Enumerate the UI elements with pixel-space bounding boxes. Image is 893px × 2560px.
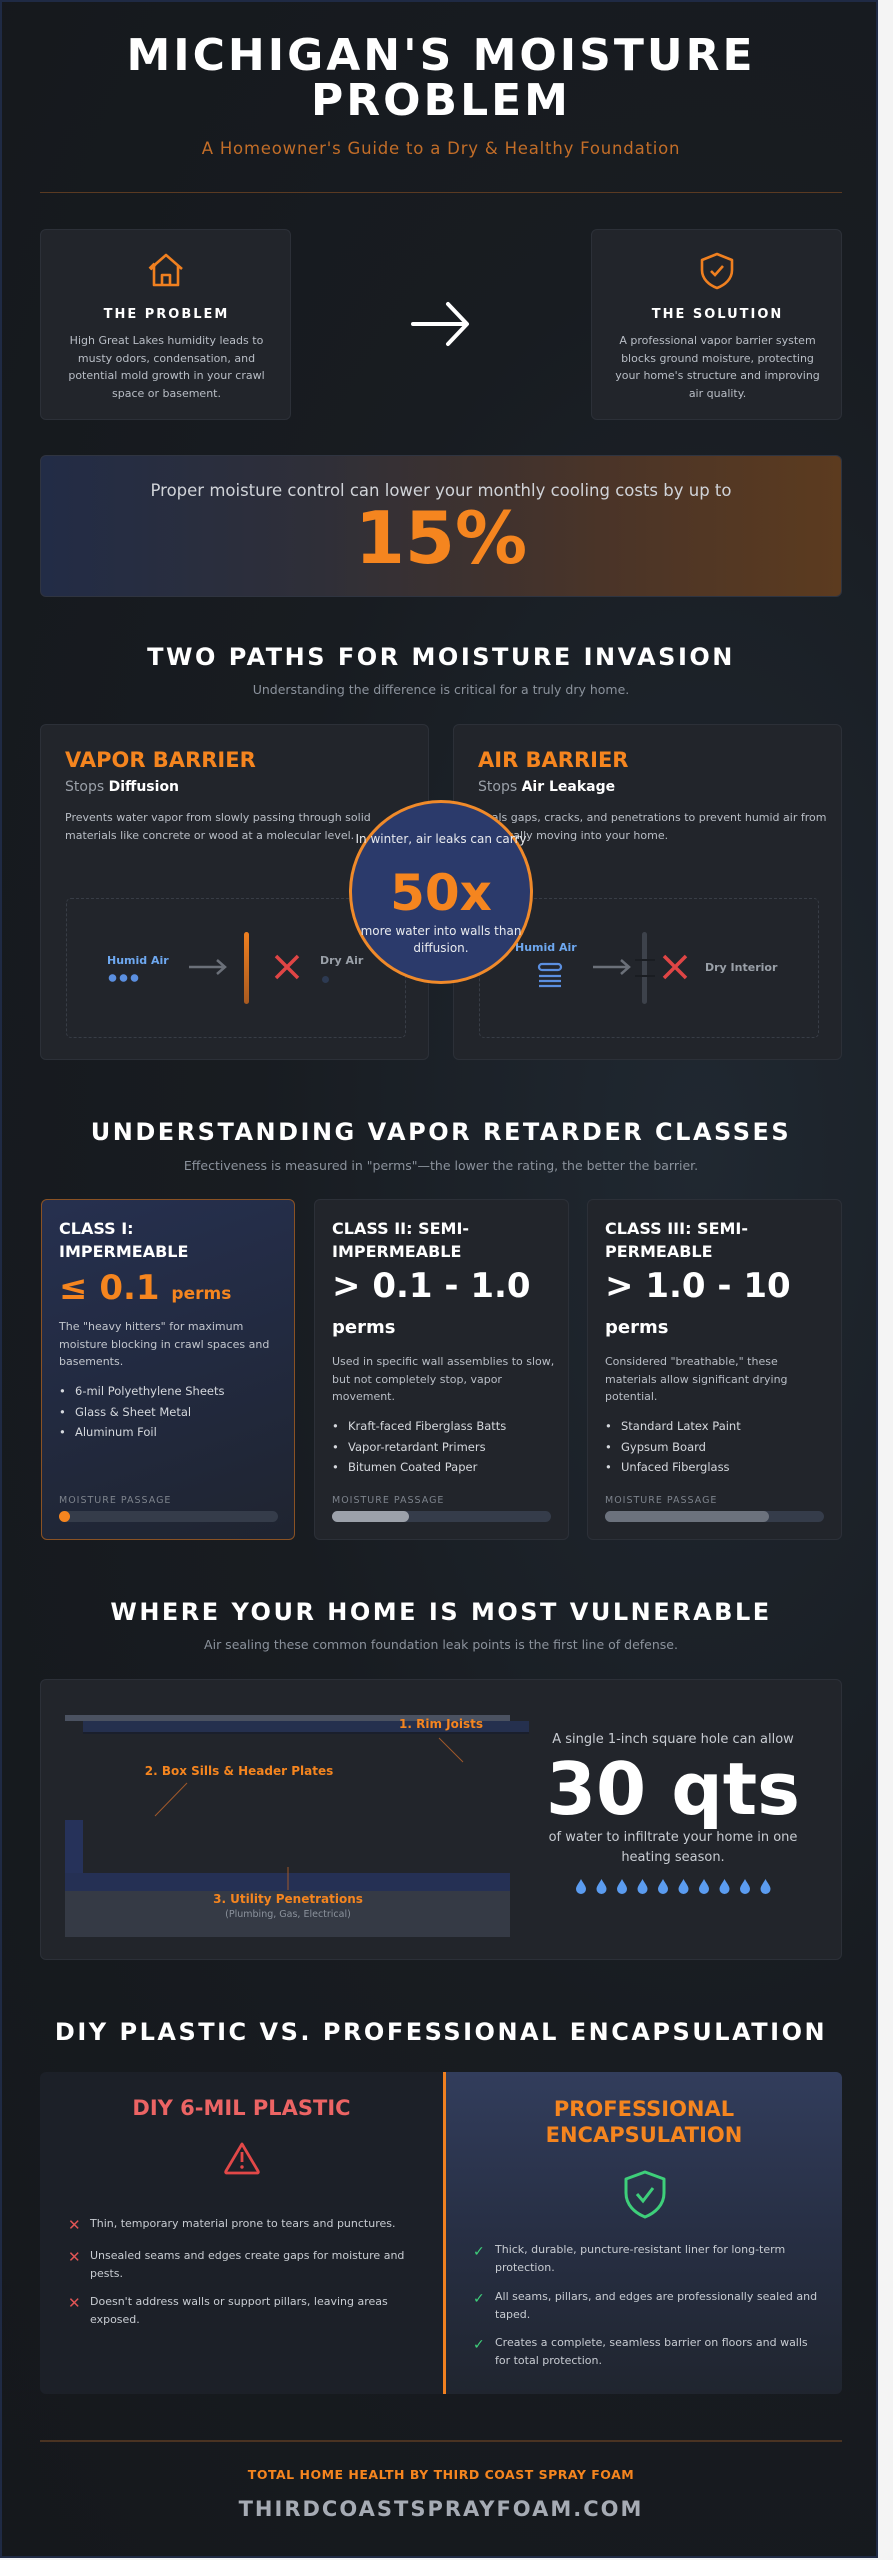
panel: vulnerable points — [40, 1679, 842, 1960]
arrow — [411, 302, 470, 346]
panel: class I: The "heavy hitters" for maximum moisture blocking in crawl spaces and basements. — [59, 1320, 269, 1368]
label: utility penetrations — [213, 1892, 363, 1920]
panel: class II: Kraft-faced Fiberglass Batts — [348, 1419, 506, 1433]
callout: 50x: In winter, air leaks can carry — [356, 832, 526, 846]
panel: class I: MOISTURE PASSAGE — [59, 1495, 171, 1506]
number: 15% — [355, 496, 527, 580]
panel: DIY — [40, 2072, 443, 2394]
title: MICHIGAN'S MOISTURE — [126, 30, 756, 81]
panel: professional: PROFESSIONAL — [554, 2097, 734, 2121]
panel: class I: Aluminum Foil — [75, 1425, 157, 1439]
label: utility penetrations: 3. Utility Penetrations — [213, 1892, 363, 1906]
heading: DIY vs professional: DIY PLASTIC VS. PROFESSIONAL ENCAPSULATION — [55, 2018, 827, 2046]
list: benefits — [473, 2243, 817, 2366]
callout: 50x: more water into walls than diffusion. — [361, 924, 521, 955]
label: rim joists: 1. Rim Joists — [399, 1717, 483, 1731]
stat: 30 qts — [546, 1732, 800, 1894]
panel: class II: Vapor-retardant Primers — [348, 1440, 486, 1454]
panel: DIY: ✕ — [68, 2294, 81, 2312]
panel: class I — [41, 1199, 295, 1540]
panel: class III: PERMEABLE — [605, 1242, 713, 1261]
callout: 50x — [349, 800, 533, 984]
stat banner: 15% — [40, 455, 842, 597]
panel: air barrier — [453, 724, 842, 1060]
panel: class II — [314, 1199, 569, 1540]
heading: THE PROBLEM — [104, 307, 229, 322]
heading: vulnerable: WHERE YOUR HOME IS MOST VULNERABLE — [110, 1598, 772, 1626]
heading: THE SOLUTION — [652, 307, 783, 322]
title — [126, 30, 756, 126]
subheading: Understanding the difference is critical for a truly dry home. — [253, 682, 629, 697]
heading: VAPOR BARRIER — [65, 748, 256, 772]
footer website: THIRDCOASTSPRAYFOAM.COM — [239, 2497, 643, 2521]
panel: class I: CLASS I: — [59, 1219, 134, 1238]
panel: class III: Unfaced Fiberglass — [621, 1460, 730, 1474]
panel: professional: ✓ — [473, 2337, 485, 2353]
heading: two paths: TWO PATHS FOR MOISTURE INVASION — [147, 643, 735, 671]
text: A professional vapor barrier system blocks ground moisture, protecting your home's structure and improving air quality. — [615, 334, 820, 400]
text: High Great Lakes humidity leads to musty odors, condensation, and potential mold growth in your crawl space or basement. — [68, 334, 265, 400]
subtitle: A Homeowner's Guide to a Dry & Healthy Foundation — [202, 139, 680, 158]
subheading: Stops Diffusion — [65, 779, 179, 795]
panel: class III: perms — [605, 1317, 668, 1338]
diagram: diffusion: Humid Air — [107, 954, 169, 967]
text: Proper moisture control can lower your monthly cooling costs by up to — [150, 481, 732, 500]
label: box sills: 2. Box Sills & Header Plates — [145, 1764, 333, 1778]
panel: class III: Gypsum Board — [621, 1440, 706, 1454]
icon: house — [148, 254, 183, 286]
panel: class III — [587, 1199, 842, 1540]
panel: class I: Glass & Sheet Metal — [75, 1404, 191, 1418]
panel: professional: ✓ — [473, 2244, 485, 2260]
stat: 30 qts: 30 qts — [546, 1747, 800, 1831]
panel: DIY: Unsealed seams and edges create gaps for moisture and pests. — [90, 2249, 404, 2280]
footer tagline: TOTAL HOME HEALTH BY THIRD COAST SPRAY FOAM — [248, 2467, 634, 2482]
panel: DIY: DIY 6-MIL PLASTIC — [132, 2096, 351, 2120]
panel: class II: Bitumen Coated Paper — [348, 1460, 477, 1474]
panel: class I: IMPERMEABLE — [59, 1242, 188, 1261]
panel: class II: MOISTURE PASSAGE — [332, 1495, 444, 1506]
label: utility penetrations: (Plumbing, Gas, Electrical) — [225, 1909, 351, 1920]
diagram: air leakage: Humid Air — [515, 941, 577, 954]
diagram: foundation — [65, 1715, 529, 1937]
icon: shield — [700, 252, 734, 290]
text: Seals gaps, cracks, and penetrations to prevent humid air from physically moving into your home. — [478, 811, 826, 842]
panel: the problem — [40, 229, 291, 420]
panel: DIY: Thin, temporary material prone to tears and punctures. — [90, 2217, 396, 2230]
panel: professional: ENCAPSULATION — [546, 2123, 742, 2147]
panel: class I: ≤ 0.1 perms — [59, 1268, 231, 1308]
heading: AIR BARRIER — [478, 748, 628, 772]
list: drawbacks — [68, 2216, 404, 2326]
text: Prevents water vapor from slowly passing through solid materials like concrete or wood at a molecular level. — [65, 811, 371, 842]
panel: professional: All seams, pillars, and edges are professionally sealed and taped. — [495, 2290, 817, 2320]
icon: shield check — [624, 2170, 666, 2218]
diagram: diffusion: Dry Air — [320, 954, 363, 967]
title: PROBLEM — [311, 75, 571, 126]
icon: warning — [224, 2142, 260, 2174]
panel: professional — [446, 2072, 842, 2394]
subheading: Effectiveness is measured in "perms"—the lower the rating, the better the barrier. — [184, 1158, 698, 1173]
diagram: air leakage — [479, 898, 819, 1038]
heading: vapor retarder classes: UNDERSTANDING VAPOR RETARDER CLASSES — [91, 1118, 791, 1146]
panel: class III: MOISTURE PASSAGE — [605, 1495, 717, 1506]
diagram: diffusion — [66, 898, 406, 1038]
subheading: Stops Air Leakage — [478, 779, 615, 795]
icon: water drops — [576, 1879, 770, 1894]
panel: class II: perms — [332, 1317, 395, 1338]
diagram: air leakage: Dry Interior — [705, 961, 777, 974]
panel: class III: > 1.0 - 10 — [605, 1266, 791, 1306]
panel: class II: IMPERMEABLE — [332, 1242, 461, 1261]
panel: professional: Creates a complete, seamless barrier on floors and walls for total protection. — [495, 2336, 808, 2366]
panel: class II: > 0.1 - 1.0 — [332, 1266, 531, 1306]
panel: class II: Used in specific wall assemblies to slow, but not completely stop, vapor movement. — [332, 1355, 554, 1403]
panel: class III: Considered "breathable," these materials allow significant drying potential. — [605, 1355, 788, 1403]
callout: 50x: 50x — [390, 864, 492, 922]
panel: professional: Thick, durable, puncture-resistant liner for long-term protection. — [495, 2243, 785, 2274]
panel: DIY: ✕ — [68, 2216, 81, 2234]
panel: class III: CLASS III: SEMI- — [605, 1219, 748, 1238]
stat: 30 qts: of water to infiltrate your home in one heating season. — [549, 1830, 797, 1865]
panel: the solution — [591, 229, 842, 420]
panel: DIY: ✕ — [68, 2248, 81, 2266]
stat: 30 qts: A single 1-inch square hole can allow — [552, 1732, 794, 1747]
subheading: Air sealing these common foundation leak points is the first line of defense. — [204, 1637, 678, 1652]
panel: class III: Standard Latex Paint — [621, 1419, 741, 1433]
panel: professional: ✓ — [473, 2291, 485, 2307]
panel: DIY: Doesn't address walls or support pillars, leaving areas exposed. — [90, 2295, 388, 2326]
panel: class I: 6-mil Polyethylene Sheets — [75, 1384, 224, 1398]
panel: class II: CLASS II: SEMI- — [332, 1219, 469, 1238]
panel: vapor barrier — [40, 724, 429, 1060]
